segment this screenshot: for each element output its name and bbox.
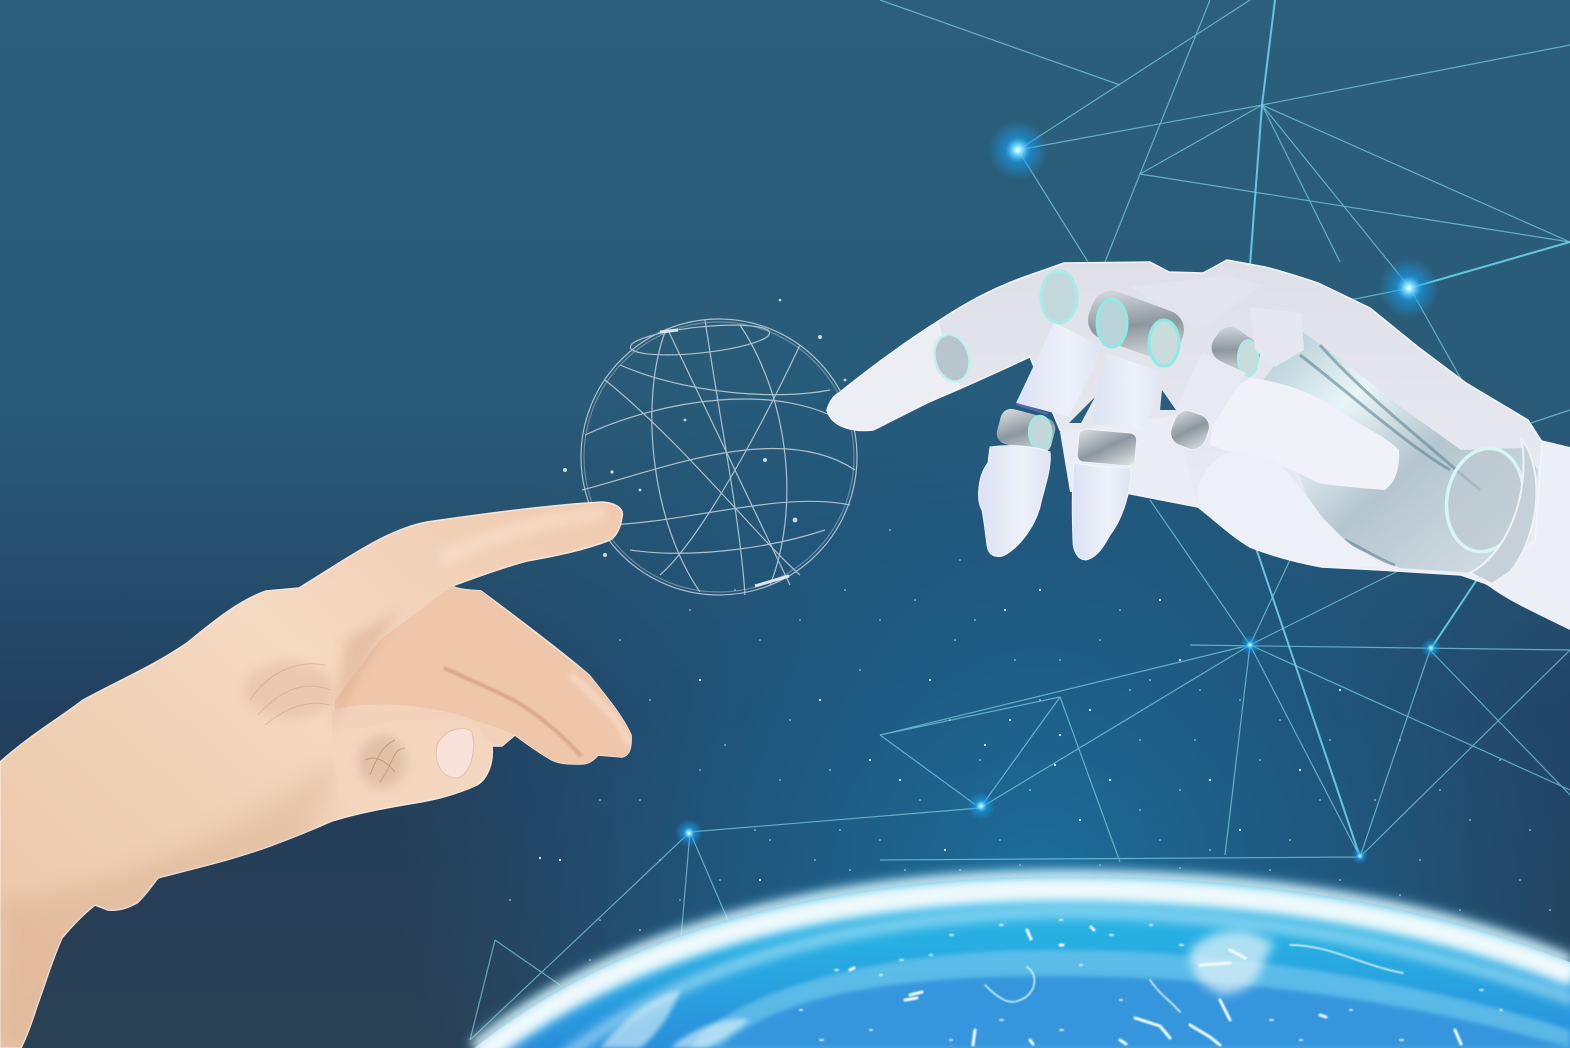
robot hand: knuckle joint one: [1041, 271, 1077, 323]
human hand: silhouette: [0, 502, 631, 1048]
network lines: [470, 0, 1570, 1040]
robot hand: main silhouette: [827, 260, 1542, 585]
human hand: index finger light: [440, 512, 605, 560]
robot hand: middle finger joint: [994, 406, 1058, 456]
star field: [510, 530, 1550, 960]
robot hand: ring fingertip: [1072, 463, 1131, 560]
robot hand: ring finger joint: [1077, 429, 1137, 466]
earth inner band: [690, 950, 1570, 1048]
robot hand: finger gaps: [1069, 390, 1176, 423]
robot hand: palm plate: [1210, 378, 1399, 490]
earth atmosphere rim: [478, 889, 1570, 1048]
human hand: ring finger: [332, 704, 515, 748]
robot hand: little knuckle ring: [1238, 340, 1258, 376]
robot hand: middle finger upper segment: [1016, 323, 1102, 417]
robot hand: wrist bracelet: [1470, 440, 1536, 584]
human hand: palm wrinkles: [245, 662, 335, 718]
robot hand: centre knuckle rings: [1097, 299, 1179, 366]
robot hand: little finger joint: [1167, 407, 1213, 453]
robot hand: little knuckle cover: [1250, 307, 1304, 367]
robot hand: little knuckle: [1206, 321, 1266, 379]
robot hand: upper knuckle plates: [1130, 275, 1262, 330]
robot hand: middle joint ring: [1029, 416, 1051, 448]
robot hand: forearm: [1470, 435, 1570, 630]
human hand: [0, 502, 640, 1048]
human hand: lower shadow: [0, 760, 340, 1048]
earth clouds: [1190, 931, 1275, 995]
robot hand: wrist ring: [1439, 442, 1531, 558]
robot hand: chrome panel: [1260, 330, 1538, 575]
human hand: thumbnail: [436, 728, 473, 778]
robot hand: index joint: [929, 330, 975, 386]
robot hand: purple joint accent: [1016, 404, 1048, 414]
robot hand: index distal segment: [827, 322, 960, 430]
human hand: finger shading: [444, 668, 581, 756]
robot hand: thumb plate: [1198, 452, 1389, 567]
human hand: rear fingers: [335, 586, 640, 765]
robot hand: centre knuckles: [1082, 285, 1190, 365]
wireframe globe: [563, 299, 857, 595]
robot hand: chrome reflections: [1300, 345, 1480, 565]
robot hand: ring finger upper segment: [1093, 353, 1164, 430]
robot hand: thumb base: [1060, 415, 1198, 505]
robot hand: middle fingertip: [979, 446, 1050, 557]
human hand: thumb: [462, 784, 478, 791]
robot hand: [827, 260, 1570, 630]
earth: [474, 877, 1570, 1048]
bright network lines: [1250, 0, 1570, 857]
robot hand: little finger segment: [1176, 353, 1246, 427]
earth land speckles: [800, 920, 1502, 1045]
sparkle nodes: [675, 120, 1441, 864]
